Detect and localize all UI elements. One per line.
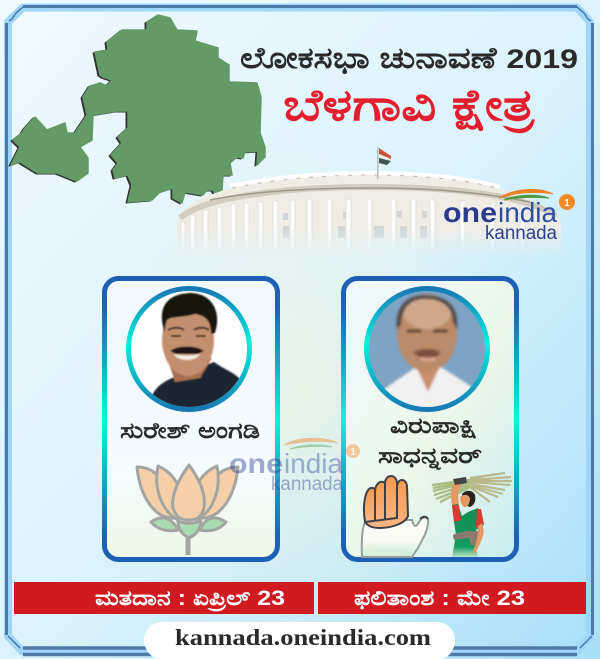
flag [377, 147, 391, 179]
oneindia logo: kannada [485, 223, 557, 244]
watermark logo [229, 438, 360, 495]
oneindia logo [443, 189, 575, 244]
watermark logo: 1 [350, 447, 356, 458]
panel: candidate Suresh Angadi [104, 278, 278, 560]
candidate name: ವಿರುಪಾಕ್ಷಿ [390, 413, 477, 440]
icon: JDS woman with crop [432, 473, 512, 557]
candidate photo: Virupakshi Sadhannavar [366, 288, 488, 412]
map of Belagavi constituency [9, 15, 265, 204]
panel: candidate Virupakshi Sadhannavar: ಸಾಧನ್ನವರ್ [378, 443, 482, 471]
oneindia logo: india [498, 197, 557, 228]
parliament building [177, 172, 561, 260]
banner: result date [318, 582, 586, 614]
candidate photo: Suresh Angadi [128, 288, 250, 412]
website pill [144, 622, 455, 659]
oneindia logo: one [443, 197, 497, 228]
subtitle: ಬೆಳಗಾವಿ ಕ್ಷೇತ್ರ [283, 81, 535, 134]
icon: Congress hand [362, 476, 428, 557]
banner: polling date: ಮತದಾನ : ಏಪ್ರಿಲ್ 23 [95, 587, 285, 612]
candidate name: ಸುರೇಶ್ ಅಂಗಡಿ [120, 418, 260, 443]
watermark logo: one [229, 448, 283, 479]
banner: polling date [14, 582, 314, 614]
icon: BJP lotus [137, 465, 238, 555]
watermark logo: kannada [271, 474, 343, 495]
watermark logo: india [284, 448, 343, 479]
banner: result date: ಫಲಿತಾಂಶ : ಮೇ 23 [354, 587, 525, 610]
title: ಲೋಕಸಭಾ ಚುನಾವಣೆ 2019 [240, 42, 578, 75]
website pill: kannada.oneindia.com [175, 625, 431, 650]
panel: candidate Virupakshi Sadhannavar [344, 278, 516, 560]
oneindia logo: 1 [564, 198, 570, 209]
